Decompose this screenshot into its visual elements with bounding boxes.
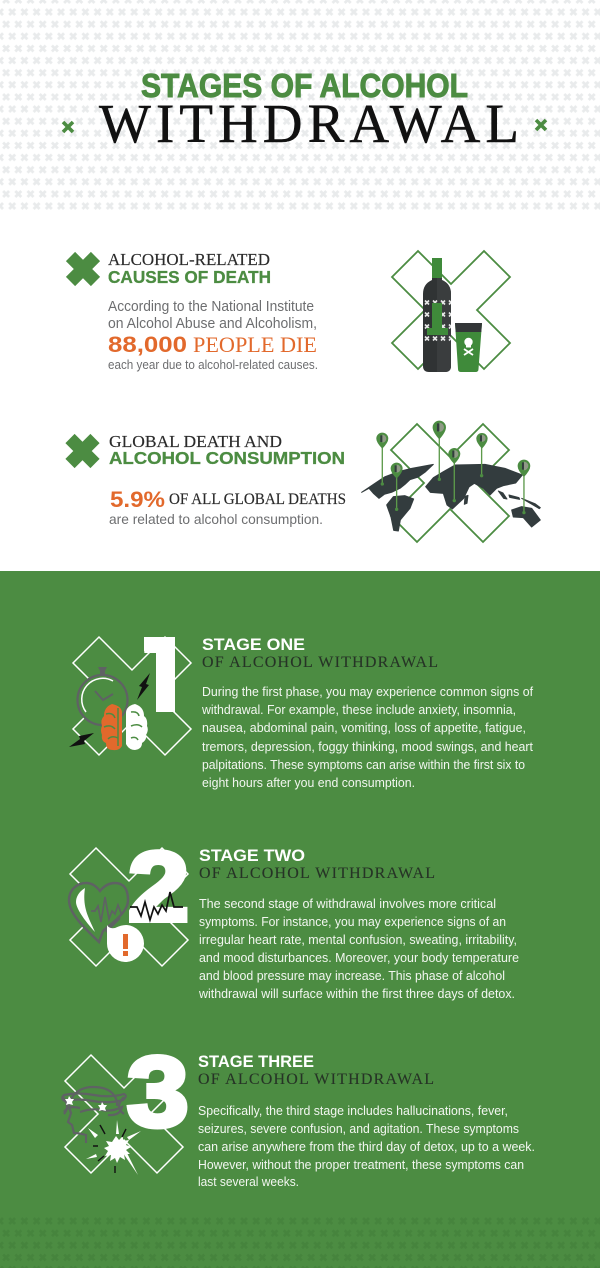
text block: global statistic [109, 487, 346, 527]
text block: stage three: can arise anywhere from the third day of detox, up to a week. [198, 1140, 535, 1154]
panel: global deaths [0, 421, 600, 1268]
title: WITHDRAWAL [99, 93, 519, 154]
text block: stage one: nausea, abdominal pain, vomiting, loss of appetite, fatigue, [202, 721, 526, 735]
header pattern background [0, 0, 600, 212]
icon: x outline behind bottle [392, 251, 510, 369]
text block: global statistic: are related to alcohol consumption. [109, 511, 323, 527]
heading: stage one [202, 635, 438, 671]
title: STAGES OF ALCOHOL [141, 67, 468, 104]
text block: stage one: eight hours after you end consumption. [202, 776, 415, 790]
text block: stage one: tremors, depression, foggy thinking, mood swings, and heart [202, 740, 534, 754]
icon: small green x right [536, 120, 546, 130]
icon: head with orbits [62, 1087, 126, 1143]
icon: burst [65, 1096, 141, 1175]
text block: global statistic: OF ALL GLOBAL DEATHS [169, 491, 346, 508]
text block: causes statistic: 88,000 [108, 332, 187, 357]
heading: causes of death: ALCOHOL-RELATED [108, 250, 270, 269]
text block: stage two: The second stage of withdrawal involves more critical [199, 897, 496, 911]
text block: stage three [198, 1104, 535, 1189]
icon: world map with pins [362, 421, 540, 531]
number 3: 3 [127, 1037, 189, 1148]
heading: stage one: STAGE ONE [202, 635, 305, 654]
icon: brain [101, 704, 148, 750]
heading: stage three: STAGE THREE [198, 1052, 314, 1071]
text block: stage three: However, without the proper treatment, these symptoms can [198, 1158, 524, 1172]
icon: stopwatch [78, 667, 128, 725]
heading: stage three [198, 1052, 434, 1088]
heading: stage two [199, 846, 435, 882]
footer pattern [0, 1215, 600, 1268]
text block: causes statistic: on Alcohol Abuse and Alcoholism, [108, 316, 317, 332]
text block: stage three: last several weeks. [198, 1175, 299, 1189]
panel: causes of death [70, 250, 510, 372]
heading: causes of death: CAUSES OF DEATH [108, 267, 271, 287]
text block: stage one: withdrawal. For example, these include anxiety, insomnia, [201, 703, 516, 717]
icon: green x [70, 438, 95, 464]
icon: x outline two [70, 848, 188, 966]
icon: small green x left [63, 122, 73, 132]
heading: stage two: STAGE TWO [199, 846, 305, 865]
icon: x outline three [65, 1055, 183, 1173]
text block: stage three: Specifically, the third stage includes hallucinations, fever, [198, 1104, 508, 1118]
panel: stage two [69, 833, 519, 1001]
panel: stage three [62, 1037, 535, 1189]
heading: global death: GLOBAL DEATH AND [109, 432, 282, 451]
number 2: 2 [128, 833, 189, 942]
text block: stage two [198, 897, 519, 1001]
icon: lightning bottom [69, 733, 94, 747]
text block: stage three: seizures, severe confusion, and agitation. These symptoms [198, 1122, 519, 1136]
icon: speech bubble alert [107, 925, 144, 962]
text block: stage two: symptoms. For instance, you may experience signs of an [199, 915, 506, 929]
number 1: 1 [114, 585, 203, 764]
text block: global statistic: 5.9% [110, 487, 165, 512]
panel: stage one [69, 636, 534, 790]
heading: global death [109, 432, 345, 468]
heading: stage two: OF ALCOHOL WITHDRAWAL [199, 865, 435, 882]
heading: stage one: OF ALCOHOL WITHDRAWAL [202, 654, 438, 671]
text block: stage two: and mood disturbances. Moreover, your body temperature [199, 951, 519, 965]
text block: stage two: and blood pressure may increase. This phase of alcohol [199, 969, 505, 983]
text block: stage two: withdrawal will surface within the first three days of detox. [198, 987, 515, 1001]
text block: stage one [201, 685, 534, 790]
icon: cup with skull [455, 323, 482, 372]
icon: green x [70, 256, 96, 282]
text block: causes statistic [108, 299, 318, 372]
green stages panel background [0, 571, 600, 1268]
icon: pulse line [130, 892, 183, 920]
icon: heart with pulse [69, 883, 128, 942]
icon: x outline one [73, 637, 191, 755]
text block: causes statistic: each year due to alcohol-related causes. [108, 358, 318, 372]
icon: x outline behind map [391, 424, 509, 542]
heading: stage three: OF ALCOHOL WITHDRAWAL [198, 1071, 434, 1088]
heading: causes of death [108, 250, 271, 287]
heading: global death: ALCOHOL CONSUMPTION [109, 448, 345, 468]
text block: stage two: irregular heart rate, mental confusion, sweating, irritability, [199, 933, 517, 947]
text block: stage one: palpitations. These symptoms can arise within the first six to [202, 758, 525, 772]
text block: causes statistic: According to the National Institute [108, 299, 314, 315]
icon: lightning top [137, 673, 150, 700]
icon: bottle [423, 258, 451, 372]
text block: causes statistic: PEOPLE DIE [193, 332, 317, 357]
text block: stage one: During the first phase, you may experience common signs of [202, 685, 534, 699]
